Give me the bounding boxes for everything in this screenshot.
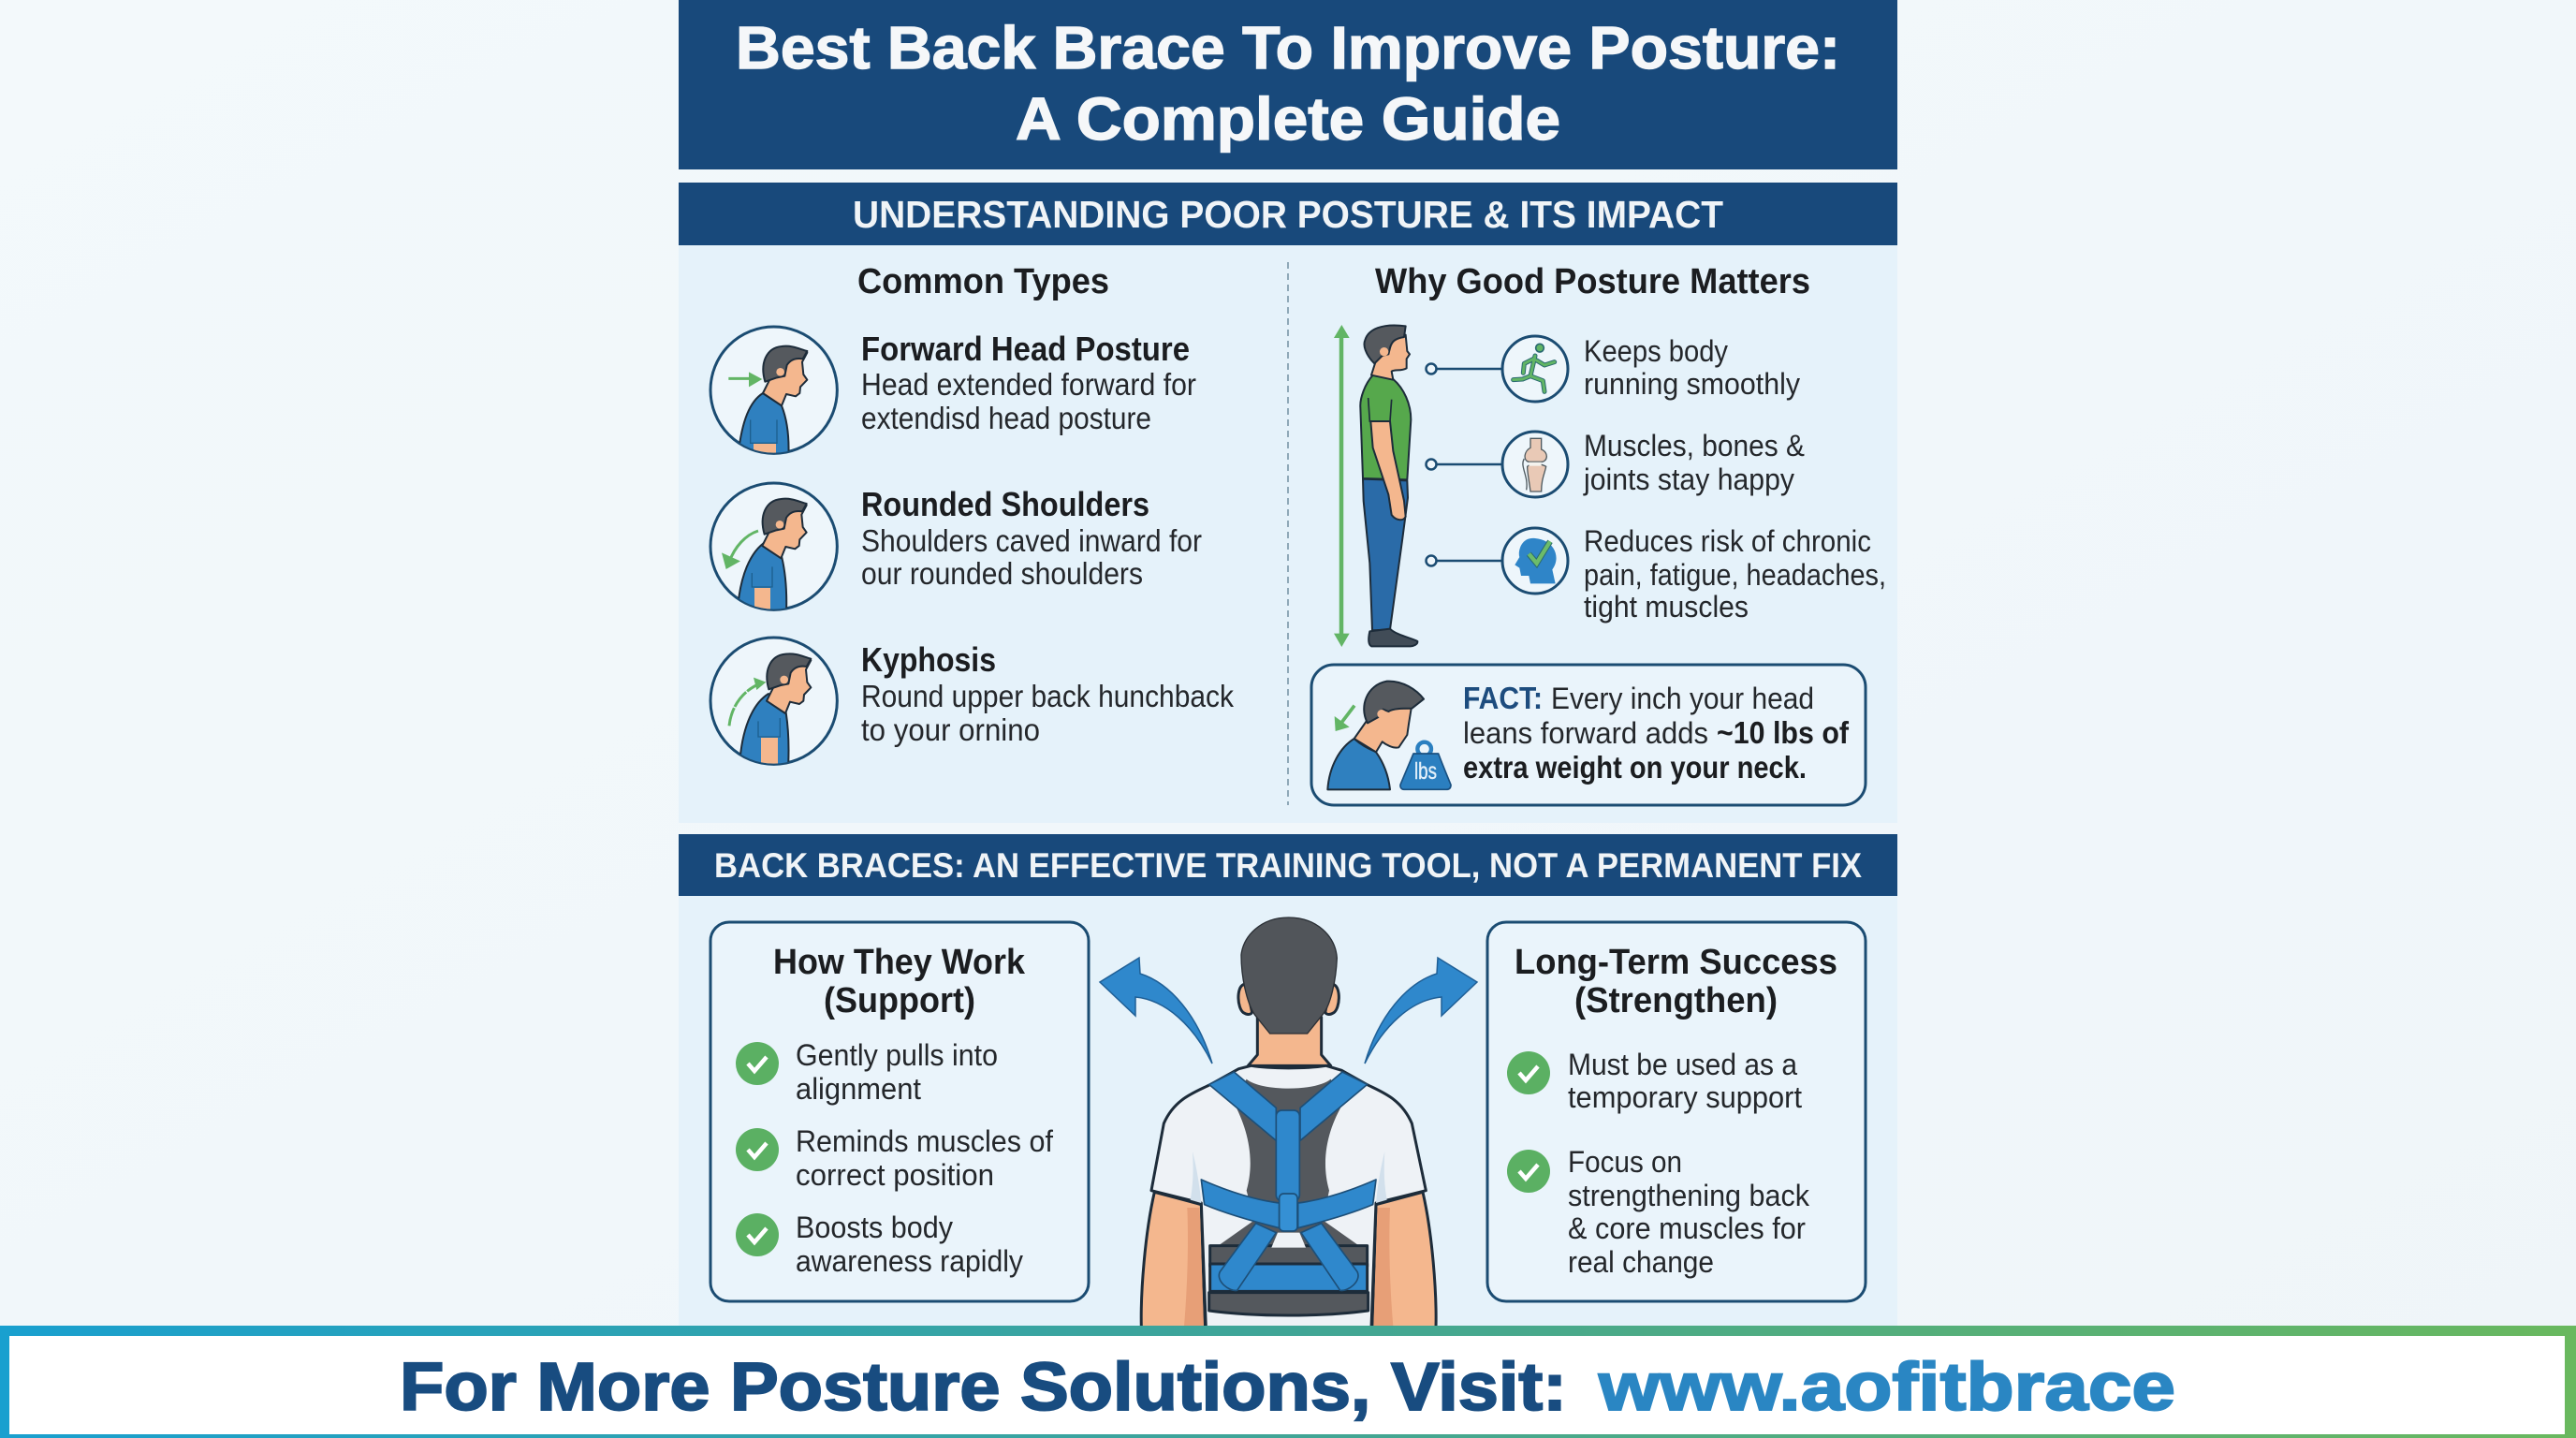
list item: boosts awareness [736, 1211, 1023, 1278]
card: long-term success [1487, 922, 1866, 1301]
benefit: keeps body running: Keeps body [1584, 334, 1728, 368]
text: kyphosis: Round upper back hunchback [861, 679, 1234, 713]
panel: back braces [679, 834, 1897, 1328]
list item: temporary support: Must be used as a [1568, 1048, 1797, 1081]
section heading: back braces: BACK BRACES: AN EFFECTIVE TRAINING TOOL, NOT A PERMANENT FIX [714, 846, 1862, 885]
list item: temporary support [1507, 1048, 1802, 1114]
section heading: understanding poor posture [679, 183, 1897, 245]
title banner: A Complete Guide [1016, 85, 1560, 153]
arrow: vertical alignment [1339, 335, 1343, 638]
heading: why good posture matters: Why Good Posture Matters [1375, 262, 1810, 301]
text: kyphosis: Kyphosis [861, 640, 996, 679]
icon: knee joint [1523, 438, 1546, 492]
text: fact statement: extra weight on your neck. [1463, 750, 1807, 785]
text: rounded shoulders: Shoulders caved inward for [861, 523, 1202, 558]
card: long-term success: Long-Term Success [1515, 943, 1837, 982]
icon: person with neck weight [1327, 682, 1451, 789]
list item: gently pulls: Gently pulls into [796, 1038, 998, 1072]
benefit: keeps body running: running smoothly [1584, 367, 1800, 401]
list item: temporary support: temporary support [1568, 1080, 1802, 1114]
list item: strengthen core [1507, 1145, 1810, 1279]
figure: standing person with good posture [1334, 325, 1417, 647]
icon: kyphosis [710, 638, 837, 768]
benefit: muscles bones joints: joints stay happy [1583, 462, 1794, 496]
text: fact statement [1463, 681, 1850, 785]
figure: person wearing back brace [1141, 917, 1436, 1328]
footer call to action [0, 1326, 2576, 1438]
text: fact statement: FACT: [1463, 681, 1543, 715]
text: forward head posture: Forward Head Posture [861, 330, 1190, 368]
text: forward head posture [861, 330, 1196, 435]
arrow: shoulders back left [1100, 958, 1212, 1064]
card: long-term success: (Strengthen) [1574, 981, 1778, 1020]
text: fact statement: ~10 lbs of [1717, 715, 1850, 750]
benefit: muscles bones joints [1427, 429, 1805, 497]
text: kyphosis [861, 640, 1234, 747]
text: weight label: lbs [1414, 758, 1437, 785]
list item: strengthen core: real change [1568, 1245, 1714, 1279]
card: how they work: How They Work [773, 943, 1026, 982]
text: rounded shoulders [861, 485, 1202, 591]
heading: common types: Common Types [857, 262, 1109, 301]
benefit: reduces risk: tight muscles [1584, 590, 1749, 624]
arrow: shoulders back right [1365, 958, 1477, 1064]
icon: forward head posture [710, 327, 837, 457]
title banner [679, 0, 1897, 169]
card: how they work [710, 922, 1089, 1301]
callout: fact [1311, 665, 1866, 805]
text: rounded shoulders: our rounded shoulders [861, 556, 1143, 591]
list item: gently pulls [736, 1038, 998, 1106]
benefit: reduces risk: Reduces risk of chronic [1584, 524, 1871, 558]
text: fact statement: leans forward adds [1463, 716, 1708, 750]
list item: strengthen core: & core muscles for [1568, 1211, 1806, 1245]
text: forward head posture: Head extended forward for [861, 367, 1196, 402]
section heading: understanding poor posture: UNDERSTANDING POOR POSTURE & ITS IMPACT [853, 193, 1723, 236]
text: rounded shoulders: Rounded Shoulders [861, 485, 1149, 523]
panel: understanding poor posture [679, 183, 1897, 823]
list item: boosts awareness: Boosts body [796, 1211, 953, 1244]
text: kyphosis: to your ornino [861, 712, 1040, 747]
footer call to action: www.aofitbrace [1598, 1350, 2175, 1425]
list item: reminds muscles [736, 1124, 1053, 1192]
benefit: keeps body running [1427, 334, 1800, 402]
list item: gently pulls: alignment [796, 1072, 921, 1106]
benefit: muscles bones joints: Muscles, bones & [1584, 429, 1805, 462]
list item: boosts awareness: awareness rapidly [796, 1244, 1023, 1278]
text: fact statement: Every inch your head [1551, 682, 1814, 715]
title banner: Best Back Brace To Improve Posture: [736, 14, 1840, 81]
list item: strengthen core: Focus on [1568, 1145, 1682, 1179]
section heading: back braces [679, 834, 1897, 896]
list item: strengthen core: strengthening back [1568, 1179, 1810, 1212]
icon: rounded shoulders [710, 483, 837, 613]
card: how they work: (Support) [824, 981, 975, 1020]
benefit: reduces risk [1427, 524, 1886, 624]
benefit: reduces risk: pain, fatigue, headaches, [1584, 558, 1886, 592]
list item: reminds muscles: correct position [796, 1158, 994, 1192]
icon: runner [1514, 344, 1555, 391]
list item: reminds muscles: Reminds muscles of [796, 1124, 1053, 1158]
icon: head with check [1515, 538, 1557, 583]
text: forward head posture: extendisd head posture [861, 401, 1151, 435]
footer call to action: For More Posture Solutions, Visit: [400, 1350, 1567, 1425]
